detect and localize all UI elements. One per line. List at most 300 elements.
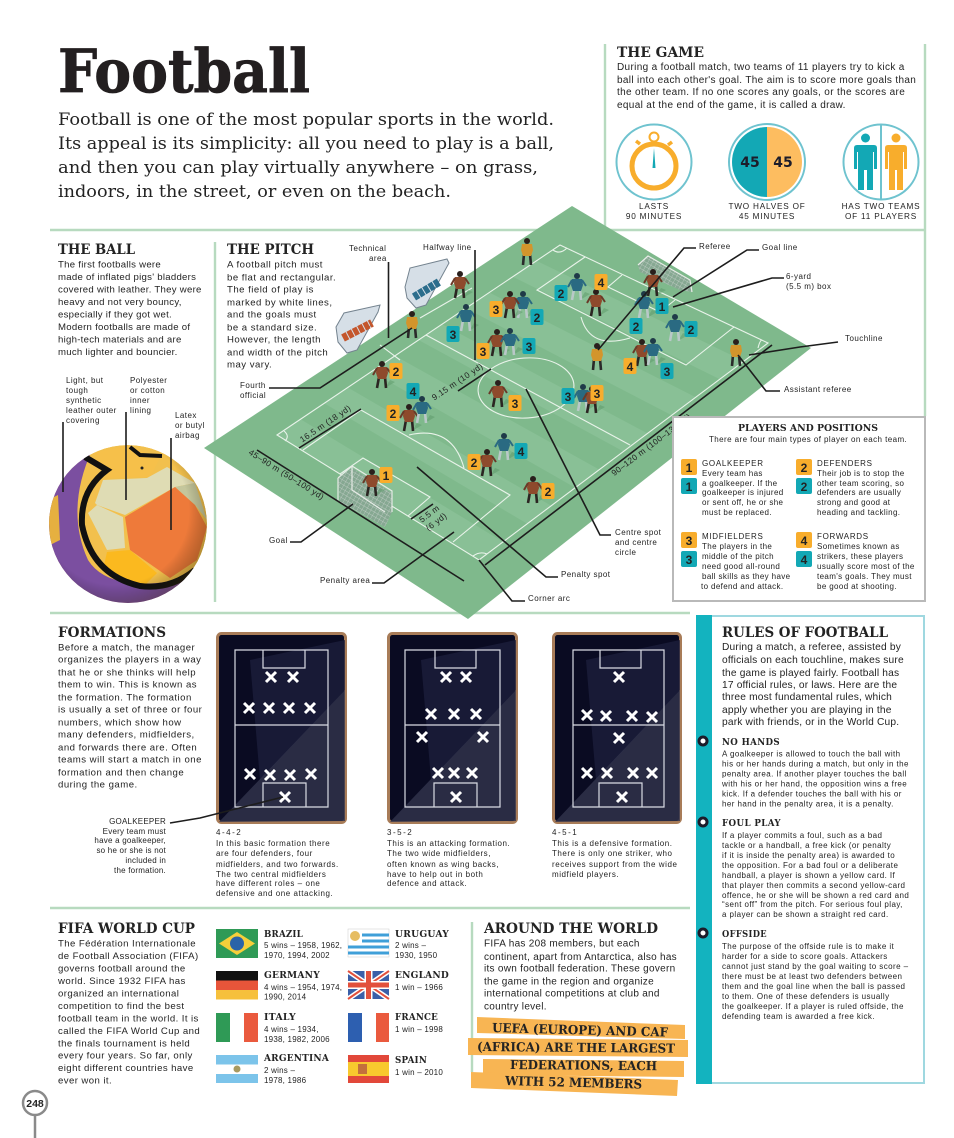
text: defenders: defenders are usually (817, 488, 901, 497)
ball labels: or butyl (175, 421, 205, 430)
callout banner: WITH 52 MEMBERS (504, 1073, 642, 1092)
winners: spain: SPAIN (395, 1055, 427, 1066)
ball labels: Polyester (130, 376, 167, 385)
player badges: 3 (493, 303, 500, 317)
text: forwards (817, 532, 915, 591)
icon: stopwatch (616, 124, 692, 200)
pitch labels: (5.5 m) box (786, 282, 831, 291)
position badges: 3 (686, 553, 693, 567)
goalkeeper note: the formation. (114, 866, 166, 875)
text: formations: that he or she thinks will help (58, 668, 196, 678)
text: midfielders: MIDFIELDERS (702, 532, 764, 541)
text: formations: organizes the players in a way (58, 654, 201, 666)
text: the game (617, 62, 916, 111)
winners: germany: 4 wins – 1954, 1974, (264, 983, 342, 992)
text: forwards: be good at shooting. (817, 582, 897, 591)
caption: 4-5-1: There is only one striker, who (552, 849, 673, 858)
captions: game facts: OF 11 PLAYERS (845, 212, 917, 221)
pitch labels: Fourth (240, 381, 266, 390)
goalkeeper note (94, 817, 167, 875)
text: fifa world cup: competition to find the best (58, 1001, 184, 1012)
text: the game: During a football match, two teams of 11 players try to kick a (617, 62, 905, 73)
text: the pitch: be a standard size. (227, 322, 317, 334)
heading: rules: RULES OF FOOTBALL (722, 625, 888, 641)
text: the pitch: and the goals must (227, 310, 317, 320)
text: defenders (817, 459, 905, 517)
text: defenders: other team scoring, so (817, 479, 904, 488)
rule: foul play: offence, he or she will be shown a red card and (722, 891, 909, 900)
players (363, 238, 742, 503)
text: fifa world cup: eight different countries have (58, 1063, 194, 1074)
captions: game facts: HAS TWO TEAMS (842, 202, 920, 211)
position badges: 1 (686, 461, 693, 475)
rule: no hands (721, 737, 909, 808)
flag: brazil (216, 929, 258, 958)
text: goalkeeper: must be replaced. (702, 508, 772, 517)
panel: around the world (468, 921, 688, 1096)
winners: england: ENGLAND (395, 970, 449, 981)
pitch labels: Penalty area (320, 576, 370, 585)
text: midfielders: need good all-round (702, 562, 780, 571)
ball labels: lining (130, 406, 151, 415)
text: around the world: FIFA has 208 members, but each (484, 938, 640, 950)
text: the game: equal at the end of the game, it is called a draw. (617, 100, 846, 111)
panel: the pitch text (227, 242, 336, 370)
rule: offside: harder for a side to score goals. Attackers (722, 952, 888, 961)
text: the ball: made of inflated pigs' bladders (58, 272, 196, 283)
captions: game facts: 90 MINUTES (626, 212, 682, 221)
text: the pitch: The field of play is (227, 284, 314, 296)
rule: foul play: handball, a player is shown a yellow card. If (722, 871, 896, 880)
caption: 3-5-2: have to help out in both (387, 870, 483, 879)
intro text: indoors, in the street, or even on the beach. (58, 182, 451, 201)
text: formations: them to win. This is known as (58, 680, 197, 690)
caption: 3-5-2: 3-5-2 (387, 828, 413, 837)
ball labels: tough (66, 386, 88, 395)
text: formations (58, 642, 203, 790)
position badges: 1 (686, 480, 693, 494)
caption: 3-5-2: The two wide midfielders, (387, 849, 491, 858)
pitch illustration (204, 206, 811, 619)
pitch labels: official (240, 391, 266, 400)
text: the ball: much lighter and bouncier. (58, 347, 178, 358)
text: the ball: Modern footballs are made of (58, 322, 190, 333)
caption: 4-4-2: In this basic formation there (216, 839, 330, 848)
text: forwards: FORWARDS (817, 532, 869, 541)
caption: 4-5-1: This is a defensive formation. (552, 839, 673, 848)
rule: offside (722, 929, 909, 1021)
pitch stripes (277, 261, 744, 560)
pitch dimension labels: (6 yd) (424, 510, 449, 533)
pitch labels: Goal (269, 536, 288, 545)
rule: foul play: FOUL PLAY (722, 818, 781, 829)
caption: 4-4-2 (216, 828, 339, 898)
text: midfielders: ball skills as they have (702, 572, 791, 581)
text: fifa world cup: every four years. So far, only (58, 1050, 193, 1062)
text: around the world: its own football federation. These govern (484, 964, 675, 974)
text: midfielders: middle of the pitch (702, 552, 774, 561)
winners: brazil: 1970, 1994, 2002 (264, 951, 330, 960)
text: the ball: high-tech materials and are (58, 334, 182, 346)
text: formations: formation and then change (58, 768, 184, 778)
intro text (58, 110, 554, 201)
callout banner (468, 1017, 688, 1096)
callout banner: FEDERATIONS, EACH (510, 1057, 657, 1073)
text: the ball: especially if they got wet. (58, 310, 172, 320)
text: formations: during the game. (58, 780, 138, 790)
pitch labels: Touchline (845, 334, 883, 343)
pitch labels: 6-yard (786, 272, 811, 281)
rule: foul play: that player then commits a second yellow-card (722, 881, 905, 890)
text: formations: and forwards there are. Often (58, 742, 197, 754)
text: formations: is usually a set of three or four (58, 704, 203, 716)
caption: 3-5-2: This is an attacking formation. (387, 839, 510, 848)
goalkeeper note: GOALKEEPER (109, 817, 166, 826)
text: defenders: Their job is to stop the (817, 469, 905, 478)
captions: game facts: LASTS (639, 202, 669, 211)
player badges: 2 (688, 323, 695, 337)
winners: uruguay: 2 wins – (395, 941, 426, 950)
text: formations: Before a match, the manager (58, 642, 196, 654)
captions: game facts: TWO HALVES OF (728, 202, 806, 211)
panel: the game (616, 45, 920, 221)
rule: offside: OFFSIDE (722, 929, 767, 940)
rule: foul play: if it is inside the penalty area) is awarded to (722, 851, 895, 860)
caption: 4-4-2: have different roles – one (216, 879, 320, 888)
text: rules intro: 17 official rules, or laws. Here are the (722, 680, 897, 691)
icon: two halves (729, 124, 805, 200)
rule markers (699, 737, 707, 937)
caption: 4-5-1: midfield players. (552, 870, 619, 879)
chalkboard: 3-5-2 (388, 634, 516, 822)
text: defenders: DEFENDERS (817, 459, 873, 468)
goal: far (638, 256, 692, 292)
panel: rules of football (696, 615, 924, 1084)
heading: fifa world cup: FIFA WORLD CUP (58, 921, 195, 937)
rule: offside: cannot just stand by the goal waiting to score – (722, 962, 909, 971)
text: forwards: team's goals. They must (817, 572, 912, 581)
rule: foul play (722, 818, 909, 919)
rule: foul play: tackle or a handball, a free kick (or penalty (722, 841, 891, 850)
rule: no hands: her hand in the penalty area, it is a penalty. (722, 800, 894, 808)
player badges: 3 (512, 397, 519, 411)
caption: 4-4-2: midfielders, and two forwards. (216, 860, 339, 869)
text: the pitch: may vary. (227, 360, 272, 370)
winners: france (395, 1012, 443, 1034)
pitch labels: Centre spot (615, 528, 662, 537)
text: the pitch: marked by white lines, (227, 298, 332, 308)
text: rules intro: three most fundamental rules, which (722, 692, 892, 703)
rule: offside: there must be at least two defenders between (722, 972, 902, 981)
winners: germany (264, 970, 342, 1002)
flag: argentina (216, 1055, 258, 1083)
text: formations: numbers, which show how (58, 718, 182, 728)
text: the ball (58, 260, 202, 358)
position badges: 3 (686, 534, 693, 548)
caption: 4-5-1 (552, 828, 677, 879)
caption: 4-5-1: receives support from the wide (552, 860, 677, 869)
panel: fifa world cup (57, 921, 449, 1086)
caption: 4-5-1: 4-5-1 (552, 828, 578, 837)
text: the game: the other team. If no one scores any goals, or the scores are (617, 87, 905, 98)
flag: spain (348, 1055, 389, 1083)
text: the pitch (227, 260, 336, 370)
pitch labels: Referee (699, 242, 731, 251)
text: rules intro: apply whether you are playing in the (722, 705, 892, 716)
winners: italy: 1938, 1982, 2006 (264, 1035, 330, 1044)
player badges: 4 (627, 360, 634, 374)
pitch markings (277, 245, 768, 560)
page number (23, 1091, 47, 1138)
winners: germany: 1990, 2014 (264, 992, 307, 1002)
text: rules intro: During a match, a referee, assisted by (722, 642, 902, 653)
pitch labels: Penalty spot (561, 570, 611, 579)
text: fifa world cup: The Fédération Internationale (58, 938, 196, 950)
text: around the world: country level. (484, 1002, 547, 1012)
rule: foul play: “sent off” from the pitch. For serious foul play, (722, 900, 903, 909)
flag: uruguay (348, 929, 389, 957)
annotation lines (257, 248, 838, 601)
text: goalkeeper: goalkeeper is injured (702, 488, 784, 497)
text: goalkeeper: GOALKEEPER (702, 459, 764, 468)
player badges (380, 274, 698, 499)
winners: argentina: ARGENTINA (263, 1053, 329, 1064)
heading: players and positions: PLAYERS AND POSITIONS (738, 423, 878, 434)
page number: 248 (26, 1098, 44, 1110)
pitch labels: Technical (349, 244, 386, 253)
text: the pitch: be flat and rectangular. (227, 272, 336, 284)
heading: the ball: THE BALL (58, 242, 135, 258)
heading: around the world: AROUND THE WORLD (483, 921, 658, 937)
winners: brazil: BRAZIL (264, 929, 303, 940)
goalkeeper note: included in (125, 856, 166, 865)
winners: argentina (263, 1053, 329, 1085)
player badges: 3 (450, 328, 457, 342)
winners: germany: GERMANY (264, 970, 320, 981)
callout banner: UEFA (EUROPE) AND CAF (492, 1020, 668, 1040)
intro text: and then you can play virtually anywhere – on grass, (58, 158, 538, 177)
player badges: 2 (390, 407, 397, 421)
rule: no hands: his or her hands during a match, but only in the (722, 760, 909, 768)
winners: spain (395, 1055, 443, 1077)
text: around the world (484, 938, 677, 1012)
pitch labels (240, 242, 883, 603)
heading: formations: FORMATIONS (58, 625, 166, 641)
text: forwards: strikers, these players (817, 552, 903, 561)
text: rules intro: park with friends, or in the World Cup. (722, 717, 899, 728)
heading: the pitch: THE PITCH (227, 242, 314, 258)
winners: uruguay (395, 929, 449, 960)
heading: the game: THE GAME (617, 45, 704, 61)
rule: offside: defending team is awarded a free kick. (722, 1012, 875, 1021)
text: the pitch: However, the length (227, 334, 321, 346)
rule: foul play: the opposition. For a bad foul or a deliberate (722, 861, 898, 870)
text: goalkeeper: Every team has (702, 469, 763, 478)
caption: 4-4-2: 4-4-2 (216, 828, 242, 837)
intro text: Football is one of the most popular sports in the world. (58, 110, 554, 129)
player badges: 2 (393, 365, 400, 379)
rule: offside: The purpose of the offside rule is to make it (722, 942, 895, 951)
pitch labels: and centre (615, 538, 657, 547)
winners: argentina: 2 wins – (264, 1066, 295, 1075)
text: midfielders: to defend and attack. (701, 582, 784, 591)
caption: 3-5-2 (387, 828, 510, 888)
goalkeeper note: so he or she is not (96, 846, 167, 855)
text: fifa world cup: organized an international (58, 988, 179, 1000)
illustration: football (49, 445, 207, 603)
rule: no hands: with his or her hand, the opposition wins a free (721, 780, 907, 788)
winners: france: FRANCE (395, 1012, 438, 1023)
bench: team one (336, 305, 380, 353)
icon: two halves: 45 (740, 155, 760, 171)
panel: players and positions (673, 417, 925, 601)
text: the ball: covered with leather. They were (58, 284, 202, 296)
player badges: 2 (633, 320, 640, 334)
caption: 4-4-2: defensive and one attacking. (216, 889, 333, 898)
winners: uruguay: 1930, 1950 (395, 951, 438, 960)
winners: brazil (264, 929, 342, 960)
text: formations: teams will start a match in one (58, 754, 202, 766)
pitch dimension labels: 45–90 m (50–100 yd) (247, 447, 326, 502)
rule: offside: the goalkeeper. If a player is ruled offside, the (722, 1002, 904, 1011)
pitch labels: area (369, 254, 387, 263)
ball labels: synthetic (66, 396, 102, 405)
text: the pitch: and width of the pitch (227, 348, 328, 358)
caption: 3-5-2: often known as wing backs, (387, 860, 499, 869)
rule: offside: them and the goal line when the ball is passed (722, 982, 905, 991)
winners: uruguay: URUGUAY (395, 929, 449, 940)
winners: france: 1 win – 1998 (395, 1025, 443, 1034)
player badges: 2 (534, 311, 541, 325)
goalkeeper leader line (170, 797, 283, 823)
text: around the world: international competitions at club and (484, 988, 660, 1000)
rule: no hands: penalty area. If another player touches the ball (722, 770, 907, 778)
text: the ball: heavy and not very bouncy, (58, 297, 182, 308)
ball labels: covering (66, 416, 100, 425)
player badges: 4 (598, 276, 605, 290)
winners: brazil: 5 wins – 1958, 1962, (264, 941, 342, 950)
pitch labels: circle (615, 548, 636, 557)
intro text: Its appeal is its simplicity: all you need to play is a ball, (58, 134, 554, 153)
rule: no hands: A goalkeeper is allowed to touch the ball with (722, 750, 901, 758)
caption: 4-4-2: The two central midfielders (216, 870, 326, 879)
flag: france (348, 1013, 389, 1042)
ball labels: leather outer (66, 406, 117, 415)
pitch dimension labels: 16.5 m (18 yd) (298, 403, 353, 444)
text: around the world: the game in the region and organize (484, 976, 654, 988)
callout banner: (AFRICA) ARE THE LARGEST (477, 1039, 676, 1056)
position badges: 4 (801, 553, 808, 567)
flag: germany (216, 971, 258, 1000)
pitch dimension labels: 9.15 m (10 yd) (430, 361, 485, 402)
text: goalkeeper: a goalkeeper. If the (702, 479, 778, 488)
player badges: 4 (410, 385, 417, 399)
rule: no hands: NO HANDS (722, 737, 780, 748)
text: midfielders: The players in the (702, 542, 772, 551)
player badges: 3 (664, 365, 671, 379)
text: fifa world cup: governs football around the (58, 964, 186, 974)
pitch labels: Corner arc (528, 594, 570, 603)
caption: 3-5-2: defence and attack. (387, 879, 467, 888)
rule: no hands: kick. If a defender touches the ball with his or (722, 790, 902, 798)
text: formations: many defenders, midfielders, (58, 730, 195, 740)
text: midfielders (701, 532, 791, 591)
position badges: 2 (801, 461, 808, 475)
text: rules intro: officials on each touchline, makes sure (722, 655, 904, 666)
text: fifa world cup: de Football Association (FIFA) (58, 951, 199, 962)
caption: 4-4-2: are four defenders, four (216, 849, 313, 858)
player badges: 2 (471, 456, 478, 470)
ball annotation lines (63, 412, 171, 530)
ball labels: Light, but (66, 376, 104, 385)
pitch dimension labels: 5.5 m (417, 503, 441, 525)
text: around the world: continent, apart from Antarctica, also has (484, 952, 677, 963)
rule: foul play: If a player commits a foul, such as a bad (722, 831, 882, 840)
text: goalkeeper (702, 459, 784, 517)
pitch dimension labels (247, 361, 693, 533)
text: fifa world cup: world. Since 1932 FIFA has (57, 976, 186, 987)
winners: italy: ITALY (264, 1012, 296, 1023)
text: the game: ball into each other's goal. The aim is to score more goals than (617, 75, 916, 86)
text: forwards: usually score most of the (817, 562, 915, 571)
chalkboard: 4-4-2 (218, 634, 346, 822)
bench: team two (405, 259, 449, 308)
player badges: 2 (558, 287, 565, 301)
text: fifa world cup: the finals tournament is held (58, 1038, 190, 1050)
pitch dimension labels: 90–120 m (100–130 yd) (609, 411, 693, 478)
panel: the ball (49, 244, 207, 603)
text: defenders: heading and tackling. (817, 508, 900, 517)
ball labels: Latex (175, 411, 197, 420)
pitch labels: Goal line (762, 243, 798, 252)
winners: england: 1 win – 1966 (395, 983, 443, 992)
text: goalkeeper: or sent off, he or she (702, 498, 784, 507)
goal: near (338, 466, 392, 527)
rule: foul play: a player can be shown a straight red card. (722, 910, 889, 919)
winners: england (395, 970, 449, 992)
rule: offside: to them. One of these defenders is usually (722, 992, 890, 1001)
ball labels: inner (130, 396, 150, 405)
position badges: 4 (801, 534, 808, 548)
title: Football (58, 37, 310, 107)
text: the pitch: A football pitch must (227, 260, 323, 270)
winners: italy: 4 wins – 1934, (264, 1025, 319, 1034)
pitch labels: Halfway line (423, 243, 472, 252)
flag: italy (216, 1013, 258, 1042)
winners: italy (264, 1012, 330, 1044)
chalkboard: 4-5-1 (554, 634, 680, 822)
pitch labels: Assistant referee (784, 385, 852, 394)
winners: spain: 1 win – 2010 (395, 1068, 443, 1077)
icon: two halves: 45 (773, 155, 793, 171)
player badges: 3 (480, 345, 487, 359)
text: formations: the formation. The formation (58, 692, 192, 704)
text: fifa world cup (57, 938, 200, 1086)
text: fifa world cup: called the FIFA World Cup and (58, 1026, 200, 1037)
player badges: 1 (383, 469, 390, 483)
text: defenders: strong and good at (817, 498, 891, 507)
text: fifa world cup: football team in the world. It is (58, 1014, 199, 1024)
panel: formations (58, 625, 680, 898)
position badges (681, 459, 812, 567)
text: the ball: The first footballs were (58, 260, 161, 270)
player badges: 3 (594, 387, 601, 401)
captions: game facts: 45 MINUTES (739, 212, 795, 221)
winners: argentina: 1978, 1986 (264, 1076, 307, 1085)
player badges: 3 (526, 340, 533, 354)
player badges: 1 (659, 300, 666, 314)
ball labels: airbag (175, 431, 200, 440)
